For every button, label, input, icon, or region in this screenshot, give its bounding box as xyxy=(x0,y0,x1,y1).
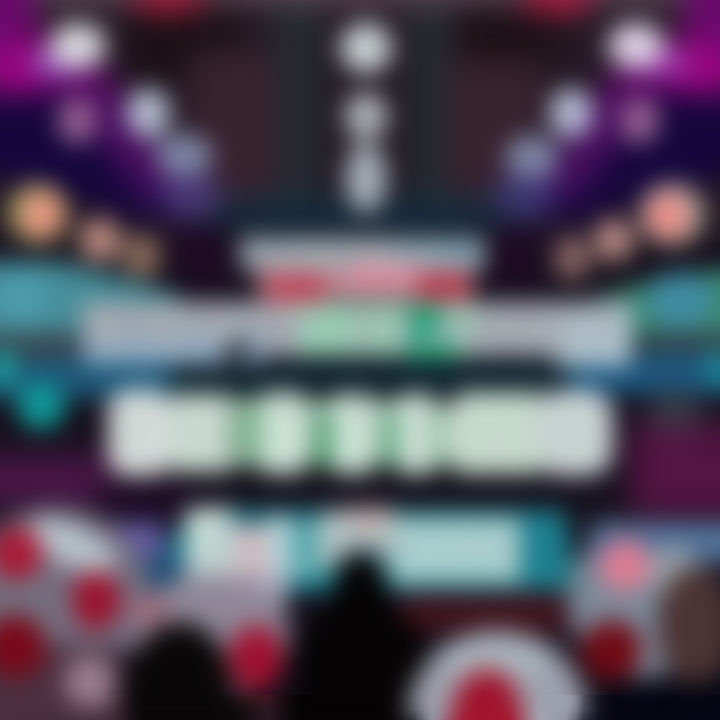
icon: soccer ball, left xyxy=(0,507,150,720)
icon: presenter silhouette, centre xyxy=(296,555,432,720)
panel: teal action banner xyxy=(108,510,575,632)
panel: purple stage lights, right xyxy=(495,0,720,225)
icon: ceiling spotlights xyxy=(30,23,692,213)
icon: spectator silhouette, left xyxy=(124,622,236,720)
panel: stadium ceiling backdrop xyxy=(0,0,720,240)
heading: ACTION xyxy=(186,508,523,604)
heading: top line: TOP PICKS xyxy=(282,240,442,273)
icon: teal orb xyxy=(17,383,65,429)
heading: second line xyxy=(82,299,632,368)
heading: second line: LEFT-HAND xyxy=(90,299,620,362)
heading: top line xyxy=(240,238,485,302)
icon: soccer ball, centre left xyxy=(130,573,290,697)
panel: purple stage lights, left xyxy=(0,0,220,225)
icon: soccer ball, right xyxy=(568,522,720,720)
panel: teal side banners xyxy=(0,262,720,398)
panel: dark column behind headline xyxy=(172,225,540,285)
icon: soccer ball, bottom centre xyxy=(407,630,587,720)
icon: coloured spotlights row xyxy=(8,183,704,280)
heading: BETTING: BETTING xyxy=(115,386,605,480)
panel: magenta side glow xyxy=(0,395,720,515)
heading: ACTION: ACTION xyxy=(193,512,523,584)
